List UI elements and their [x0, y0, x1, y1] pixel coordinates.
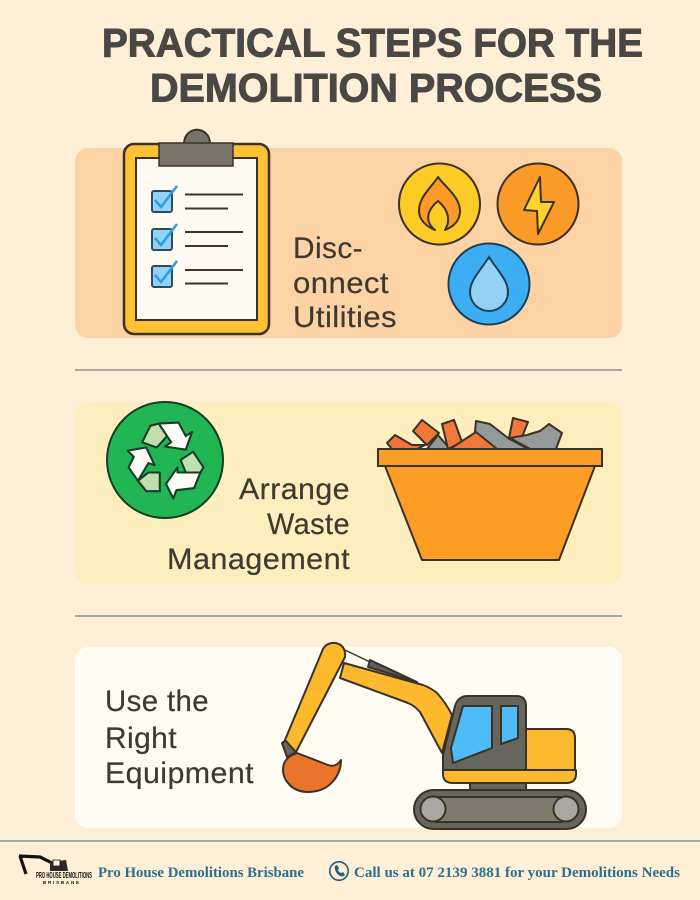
text: Use the Right Equipment: Use the — [105, 685, 209, 718]
title: DEMOLITION PROCESS — [150, 66, 602, 110]
icon: gas flame — [399, 164, 480, 244]
icon: electricity bolt — [498, 164, 578, 244]
icon: recycling symbol — [107, 402, 223, 518]
icon: water drop — [448, 244, 530, 324]
title — [102, 22, 643, 110]
icon: phone — [330, 862, 348, 880]
text: Use the Right Equipment — [105, 685, 254, 790]
icon: clipboard checklist — [124, 130, 269, 334]
text: Use the Right Equipment: Right — [105, 722, 177, 755]
logo: Pro House Demolitions Brisbane: BRISBANE — [43, 880, 79, 885]
text: Use the Right Equipment: Equipment — [105, 757, 254, 790]
text: Arrange Waste Management: Arrange — [239, 473, 350, 506]
panel: use the right equipment — [75, 643, 622, 829]
footer: PRO HOUSE DEMOLITIONS — [36, 870, 92, 880]
text: Arrange Waste Management: Management — [167, 543, 350, 576]
text: Disconnect Utilities: onnect — [293, 267, 389, 300]
panel: disconnect utilities — [75, 130, 622, 338]
title: PRACTICAL STEPS FOR THE — [102, 22, 643, 66]
text: Disconnect Utilities: Disc- — [293, 232, 363, 265]
call to action: Call us at 07 2139 3881 for your Demolitions Needs — [354, 865, 680, 881]
text: Arrange Waste Management — [167, 473, 350, 576]
text: Arrange Waste Management: Waste — [267, 508, 350, 541]
icon: excavator — [282, 643, 586, 829]
company name: Pro House Demolitions Brisbane — [98, 865, 305, 881]
text: Disconnect Utilities — [293, 232, 397, 334]
logo: Pro House Demolitions Brisbane — [19, 856, 92, 885]
text: Disconnect Utilities: Utilities — [293, 301, 397, 334]
panel: arrange waste management — [75, 402, 622, 584]
icon: waste skip bin — [378, 418, 602, 560]
footer — [19, 856, 680, 885]
